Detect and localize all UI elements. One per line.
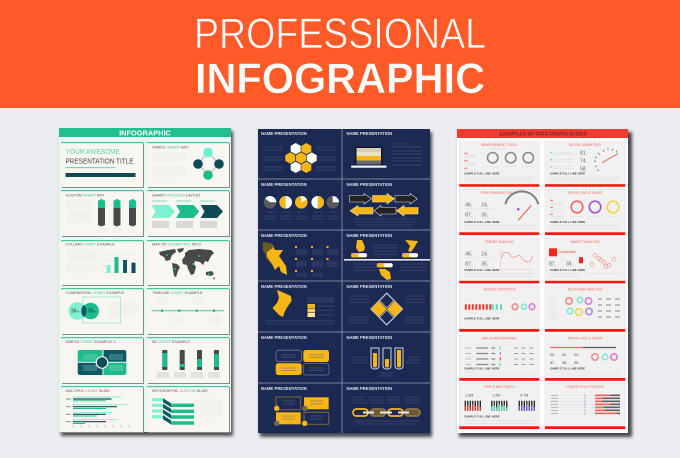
red slide: performance gauge: SAMPLE FULL LINE HERE xyxy=(464,220,500,224)
red slide: barcode charts: 1.5M xyxy=(465,393,473,397)
red slide: triple circle with progress bar: 87. xyxy=(550,361,555,365)
slide: map of geometric info: MAP OF GEOMETRIC INFO xyxy=(152,243,201,247)
poster header: INFOGRAPHIC xyxy=(119,129,172,138)
navy slide: timeline with regions: NAME PRESENTATION xyxy=(346,233,392,238)
slide: multiple chart xyxy=(61,386,144,433)
red slide: digital marketing: SAMPLE FULL LINE HERE xyxy=(550,171,585,175)
red slide: market analysis bubbles: 87. xyxy=(549,261,556,267)
red slide: triple circle with progress bar: 35. xyxy=(562,361,567,365)
red slide: data table xyxy=(459,335,539,381)
navy slide: chain xyxy=(346,386,420,424)
navy slide: test tubes: NAME PRESENTATION xyxy=(346,335,392,340)
red slide: multi-ring analysis: MULTI-RING ANALYSIS xyxy=(568,288,602,292)
poster: green slides xyxy=(59,128,231,433)
slide: infographic custom xyxy=(147,386,230,433)
red slide: target analysis line chart: 46. xyxy=(465,251,472,257)
navy slide: hexagons xyxy=(261,131,336,173)
red slide: gender statistics: SAMPLE FULL LINE HERE xyxy=(464,316,500,320)
slide: simple smart art: SIMPLE SMART ART xyxy=(152,145,189,149)
slide: presentation title: PRESENTATION TITLE xyxy=(66,159,134,166)
navy slide: rounded boxes: NAME PRESENTATION xyxy=(261,335,307,340)
red slide: triple circle with progress bar: 00. xyxy=(550,353,555,357)
poster header xyxy=(457,129,628,138)
red slide: triple circle with progress bar: 24. xyxy=(574,353,579,357)
red slide: data table: INDUSTRIES RANKING xyxy=(482,336,517,340)
slide: comparison chart: 78% xyxy=(87,308,96,314)
poster: red slides xyxy=(457,129,628,433)
red slide: triple circle with progress bar: SAMPLE FULL LINE HERE xyxy=(550,366,585,370)
red slide: performance gauge: 87. xyxy=(465,212,472,218)
red slide: digital marketing: 74. xyxy=(580,159,587,165)
red slide: target analysis line chart: TARGET ANALYSIS xyxy=(485,240,514,244)
poster header xyxy=(59,128,231,138)
red slide: triple circle with progress bar xyxy=(545,335,625,381)
red slide: triple circle chart: TRIPLE CIRCLE CHART xyxy=(567,191,603,195)
red slide: gender statistics xyxy=(459,286,539,332)
red slide: barcode charts: TRIPLE BAR GRAPH xyxy=(484,385,515,389)
navy slide: arrows: NAME PRESENTATION xyxy=(346,182,392,187)
navy slide: laptop xyxy=(346,131,422,168)
red slide: measurement tools: SAMPLE FULL LINE HERE xyxy=(464,171,500,175)
red slide: performance gauge: PERFORMANCE GAUGE xyxy=(481,191,518,195)
poster shadow: red xyxy=(459,132,632,437)
red slide: triple circle with progress bar: TRIPLE CIRCLE CHART xyxy=(567,336,603,340)
red slide: barcode charts: 0.7M xyxy=(520,393,528,397)
banner xyxy=(0,0,680,108)
red slide: horizontal bar chart: COMPETITIVE POSITION xyxy=(566,385,605,389)
navy slide: chain: NAME PRESENTATION xyxy=(346,386,392,391)
slide: presentation title: YOUR AWESOME xyxy=(66,149,120,156)
slide: infographic custom: INFOGRAPHIC CUSTOM SLIDE xyxy=(152,389,208,393)
slide: comparison chart: 36% xyxy=(71,308,79,314)
red slide: market analysis bubbles: MARKET ANALYSIS xyxy=(570,240,600,244)
red slide: barcode charts xyxy=(459,383,539,429)
navy slide: region map xyxy=(261,284,335,324)
red slide: performance gauge: 46. xyxy=(465,202,472,208)
slide: column chart xyxy=(61,240,144,286)
navy slide: pies xyxy=(261,182,339,219)
navy slide: map with legend xyxy=(261,233,338,276)
title line: PROFESSIONAL: PROFESSIONAL xyxy=(194,10,486,58)
red slide: data table: SAMPLE FULL LINE HERE xyxy=(464,366,500,370)
slide: smart process layout xyxy=(147,190,230,237)
slide: smart process layout: SMART PROCESS LAYOUT xyxy=(152,194,201,198)
red slide: triple circle with progress bar: 24. xyxy=(562,353,567,357)
red slide: digital marketing: 81. xyxy=(580,151,587,157)
slide: comparison chart xyxy=(61,288,144,335)
red slide: barcode charts: 1.2M xyxy=(492,393,500,397)
navy slide: map with legend: NAME PRESENTATION xyxy=(261,233,307,238)
red slide: market analysis bubbles: 35. xyxy=(566,261,573,267)
poster header: EXAMPLES OF DATA DRIVEN SLIDES xyxy=(500,132,587,138)
red slide: performance gauge xyxy=(459,189,539,235)
slide: custom smart art xyxy=(61,190,144,237)
red slide: performance gauge: 35. xyxy=(481,212,488,218)
navy slide: timeline with regions xyxy=(344,233,430,280)
slide: simple chart 2: SIMPLE CHART EXAMPLE 2 xyxy=(66,340,116,344)
red slide: triple circle chart xyxy=(545,189,625,235)
poster: navy slides xyxy=(258,129,430,433)
slide: column chart: COLUMN CHART EXAMPLE xyxy=(66,243,115,247)
red slide: market analysis bubbles: Competition xyxy=(558,250,576,254)
red slide: market analysis bubbles: SAMPLE FULL LINE HERE xyxy=(550,268,585,272)
slide: map of geometric info xyxy=(147,240,230,286)
slide: simple smart art xyxy=(147,142,230,188)
poster shadow: navy xyxy=(260,132,432,437)
navy slide: laptop: NAME PRESENTATION xyxy=(346,131,392,136)
red slide: triple circle chart: SAMPLE FULL LINE HERE xyxy=(550,220,585,224)
slide: 3D chart xyxy=(147,337,230,384)
slide: simple chart 2 xyxy=(61,337,144,384)
slide: multiple chart: MULTIPLE CHART SLIDE xyxy=(66,389,110,393)
navy slide: diamonds xyxy=(346,284,425,325)
red slide: target analysis line chart: 87. xyxy=(465,261,472,267)
red slide: multi-ring analysis xyxy=(545,286,625,332)
red slide: measurement tools xyxy=(459,142,539,187)
red slide: digital marketing xyxy=(545,142,625,187)
navy slide: region map: NAME PRESENTATION xyxy=(261,284,307,289)
red slide: digital marketing: DIGITAL MARKETING xyxy=(569,143,601,147)
navy slide: hexagons: NAME PRESENTATION xyxy=(261,131,307,136)
navy slide: rounded boxes xyxy=(261,335,329,375)
poster shadow: green xyxy=(61,131,233,436)
navy slide: diamonds: NAME PRESENTATION xyxy=(346,284,392,289)
navy slide: arrows xyxy=(346,182,418,225)
red slide: target analysis line chart: 24. xyxy=(481,251,488,257)
red slide: target analysis line chart xyxy=(459,238,539,283)
red slide: performance gauge: 24. xyxy=(481,202,488,208)
navy slide: test tubes xyxy=(346,335,421,376)
slide: custom smart art: CUSTOM SMART ART xyxy=(66,194,105,198)
title line: INFOGRAPHIC: INFOGRAPHIC xyxy=(195,55,485,103)
red slide: horizontal bar chart xyxy=(545,383,625,429)
navy slide: boxes with dots xyxy=(261,386,329,426)
red slide: target analysis line chart: SAMPLE FULL LINE HERE xyxy=(464,268,500,272)
slide: timeline chart xyxy=(147,288,230,335)
slide: comparison chart: COMPARISON CHART EXAMPLE xyxy=(66,291,125,295)
red slide: digital marketing: 58. xyxy=(580,167,587,173)
navy slide: pies: NAME PRESENTATION xyxy=(261,182,307,187)
red slide: target analysis line chart: 35. xyxy=(481,261,488,267)
red slide: market analysis bubbles xyxy=(545,238,625,283)
slide: timeline chart: TIMELINE CHART EXAMPLE xyxy=(152,291,203,295)
slide: 3D chart: 3D CHART EXAMPLE xyxy=(152,340,190,344)
red slide: barcode charts: SAMPLE FULL LINE HERE xyxy=(464,414,500,418)
red slide: triple circle with progress bar: 35. xyxy=(574,361,579,365)
red slide: measurement tools: MEASUREMENT TOOLS xyxy=(481,143,517,147)
red slide: gender statistics: GENDER STATISTICS xyxy=(483,288,516,292)
slide: presentation title xyxy=(61,142,144,188)
navy slide: boxes with dots: NAME PRESENTATION xyxy=(261,386,307,391)
